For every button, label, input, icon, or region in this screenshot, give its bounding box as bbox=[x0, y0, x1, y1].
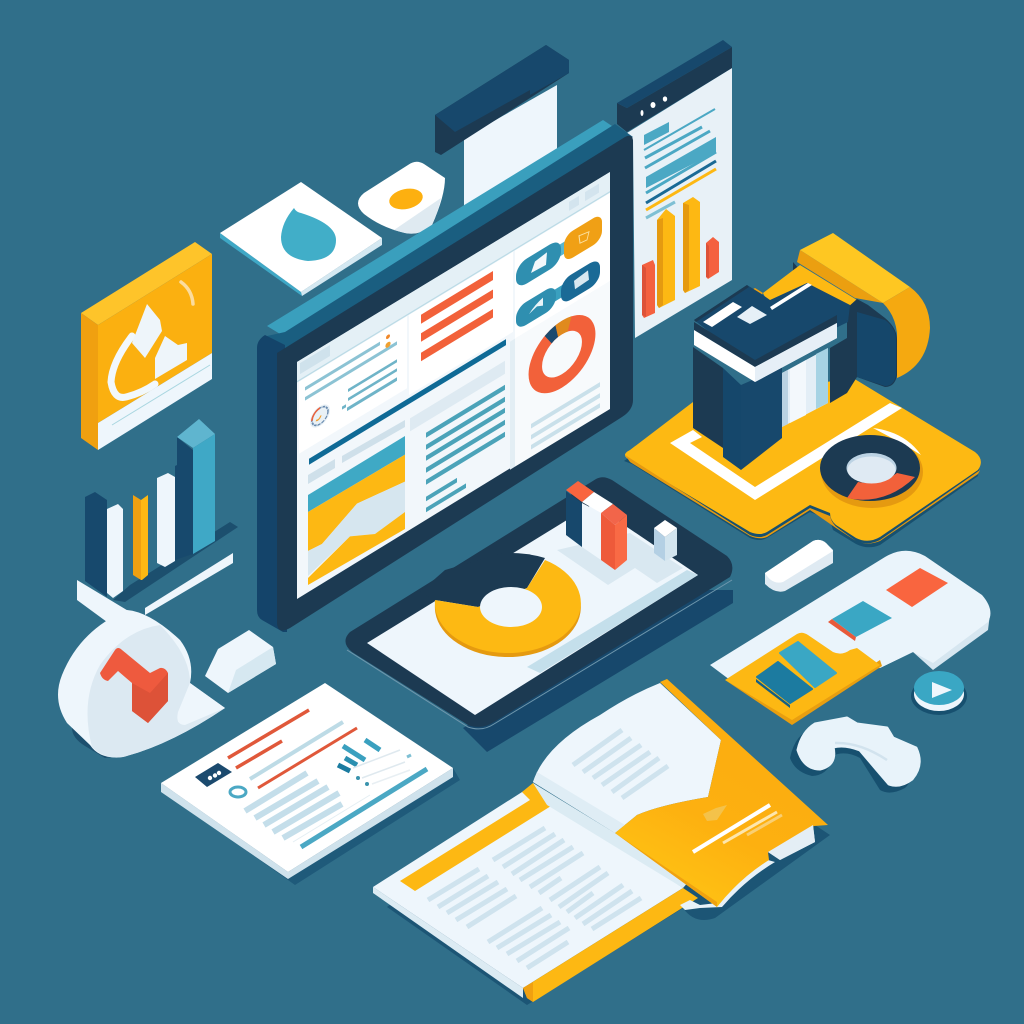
red swatch bbox=[886, 568, 948, 607]
yellow cover bbox=[615, 679, 828, 907]
monitor top edge bbox=[267, 120, 615, 337]
browser window with chart bbox=[617, 40, 732, 338]
control panel with swatches bbox=[710, 551, 990, 725]
open book bbox=[373, 679, 830, 1005]
area chart bbox=[308, 420, 405, 585]
hanging paper banner bbox=[435, 45, 569, 217]
telephone handset bbox=[790, 718, 919, 793]
yellow tile with image icon bbox=[81, 242, 212, 450]
icon: ring bbox=[230, 787, 246, 797]
monitor side bbox=[257, 335, 287, 632]
speech bubble with red arrow bbox=[58, 610, 225, 758]
panel: donut bbox=[515, 281, 610, 467]
panel: red bars bbox=[409, 252, 513, 395]
tablet body bbox=[345, 477, 732, 727]
donut chart bbox=[420, 553, 581, 657]
panel: text lines bbox=[426, 385, 505, 512]
icon: navy badge bbox=[195, 763, 232, 787]
mini bar chart bbox=[338, 740, 411, 786]
tablet with donut chart bbox=[345, 477, 733, 752]
panel: icon buttons bbox=[515, 193, 610, 339]
icon: red arrow bbox=[100, 648, 168, 723]
screen header bbox=[297, 172, 610, 382]
camera arm bbox=[847, 299, 897, 393]
book tab overlay bbox=[768, 825, 815, 860]
isometric bars bbox=[566, 481, 677, 570]
egg shaped badge bbox=[358, 162, 445, 234]
monitor bezel bbox=[277, 136, 633, 630]
pill button bbox=[765, 540, 833, 592]
panel: summary bbox=[299, 316, 407, 454]
monitor bbox=[257, 120, 633, 632]
text lines bbox=[228, 710, 427, 847]
section divider bar bbox=[309, 339, 506, 465]
panel: yellow tray bbox=[725, 633, 882, 725]
tablet screen bbox=[367, 504, 698, 715]
monitor screen bbox=[297, 172, 610, 599]
camera body bbox=[693, 283, 850, 470]
left page bbox=[373, 783, 698, 1002]
base donut bbox=[820, 428, 923, 508]
small pale block bbox=[205, 630, 276, 693]
icon: pen nib bbox=[703, 805, 727, 821]
teal swatch bbox=[828, 601, 892, 641]
yellow base bbox=[624, 378, 981, 547]
tablet stand bbox=[463, 590, 733, 752]
icon: water drop bbox=[281, 208, 336, 261]
tile with water drop icon bbox=[220, 182, 382, 296]
yellow handle bbox=[735, 233, 930, 378]
camera device on yellow base bbox=[624, 233, 981, 547]
book gutter bbox=[533, 783, 690, 888]
right page bbox=[533, 683, 721, 833]
bar chart: isometric columns bbox=[77, 419, 238, 622]
book shadow bbox=[387, 795, 830, 1005]
page edges and tab bbox=[680, 825, 815, 910]
play button bbox=[911, 671, 967, 715]
document with charts bbox=[161, 683, 460, 885]
